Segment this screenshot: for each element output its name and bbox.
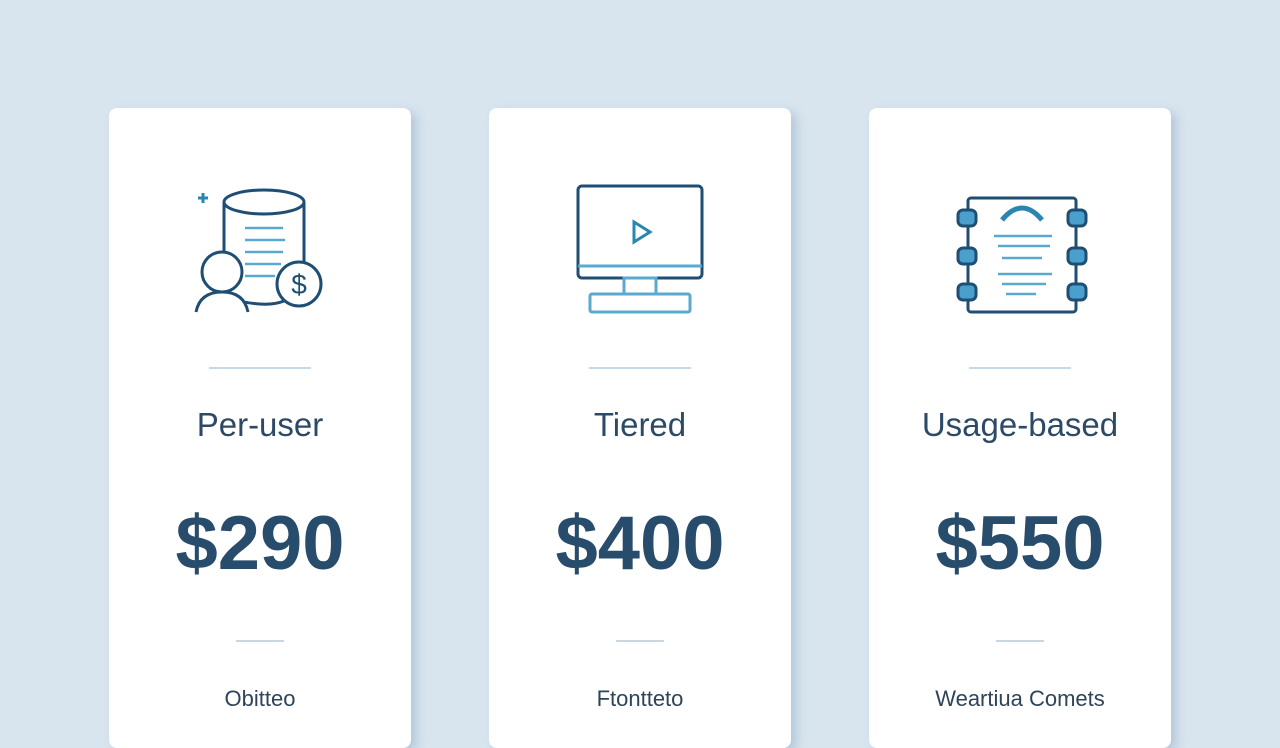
- price: $550: [935, 501, 1105, 586]
- card: per-user: [109, 108, 411, 748]
- plan name: Per-user: [197, 406, 323, 443]
- plan name: Usage-based: [922, 406, 1118, 443]
- footer label: Ftontteto: [597, 686, 683, 711]
- icon: monitor with play: [576, 184, 704, 314]
- footer label: Obitteo: [225, 686, 295, 711]
- icon: database with user and dollar: $: [291, 269, 307, 300]
- icon: database with user and dollar: [194, 188, 322, 312]
- icon: document with gear and nodes: [956, 196, 1088, 314]
- price: $400: [555, 501, 725, 586]
- plan name: Tiered: [594, 406, 686, 443]
- card: tiered: [489, 108, 791, 748]
- card: usage-based: [869, 108, 1171, 748]
- footer label: Weartiua Comets: [935, 686, 1105, 711]
- price: $290: [175, 501, 345, 586]
